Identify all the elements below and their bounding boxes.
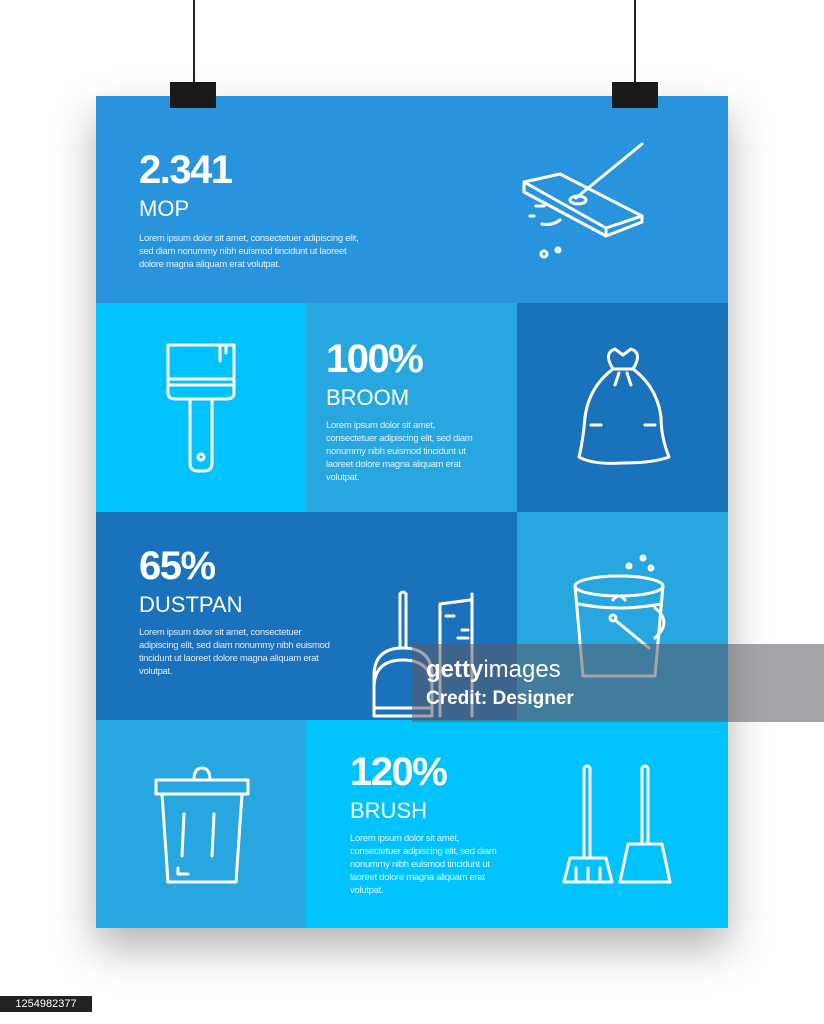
text: mop: 2.341 xyxy=(139,148,232,192)
text: dustpan xyxy=(139,544,330,677)
icon: broom and dustpan xyxy=(562,764,672,884)
panel: broom xyxy=(306,303,517,512)
clips xyxy=(170,82,216,108)
icon: bucket xyxy=(574,554,666,678)
watermark: Credit: Designer xyxy=(426,688,574,709)
text: mop xyxy=(139,148,358,270)
text: dustpan: Lorem ipsum dolor sit amet, consectetuer adipiscing elit, sed diam nonummy nibh euismod tincidunt ut laoreet dolore magna aliquam erat volutpat. xyxy=(139,627,330,677)
text: broom xyxy=(326,337,472,483)
icon: trash bin xyxy=(154,766,250,884)
text: mop: MOP xyxy=(139,196,189,221)
icon: mop xyxy=(522,142,644,258)
watermark: gettyimages xyxy=(426,656,561,683)
icon: dustpan xyxy=(372,590,474,718)
text: broom: Lorem ipsum dolor sit amet, consectetuer adipiscing elit, sed diam nonummy nibh euismod tincidunt ut laoreet dolore magna aliquam erat volutpat. xyxy=(326,420,472,483)
text: broom: 100% xyxy=(326,337,422,381)
hanging strings xyxy=(193,0,195,84)
text: brush: Lorem ipsum dolor sit amet, consectetuer adipiscing elit, sed diam nonummy nibh euismod tincidunt ut laoreet dolore magna aliquam erat volutpat. xyxy=(350,833,496,896)
text: dustpan: DUSTPAN xyxy=(139,592,242,617)
text: brush xyxy=(350,750,496,896)
panel: trash bin xyxy=(96,720,306,928)
text: dustpan: 65% xyxy=(139,544,215,588)
panel: garbage bag xyxy=(517,303,728,512)
text: broom: BROOM xyxy=(326,385,409,410)
image id: 1254982377 xyxy=(15,998,77,1010)
panel: mop xyxy=(96,96,728,303)
poster xyxy=(96,96,728,928)
icon: bag xyxy=(578,348,670,465)
icon: brush xyxy=(166,344,236,472)
watermark xyxy=(412,644,824,722)
image id xyxy=(0,996,92,1012)
panel: brush xyxy=(306,720,728,928)
text: brush: 120% xyxy=(350,750,446,794)
panel: dustpan xyxy=(96,512,517,720)
panel: bucket xyxy=(517,512,728,720)
text: brush: BRUSH xyxy=(350,798,427,823)
panel: paint brush xyxy=(96,303,306,512)
text: mop: Lorem ipsum dolor sit amet, consectetuer adipiscing elit, sed diam nonummy nibh euismod tincidunt ut laoreet dolore magna aliquam erat volutpat. xyxy=(139,233,358,270)
